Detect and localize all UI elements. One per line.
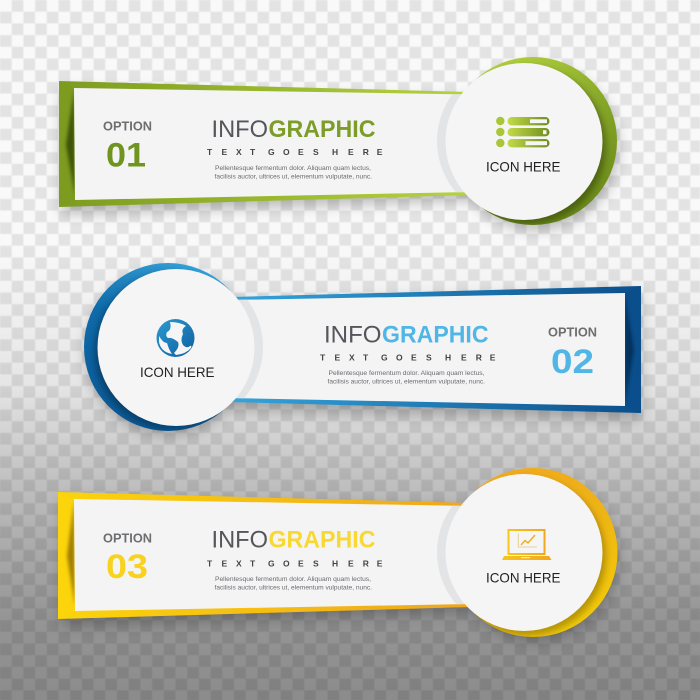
heading 03 xyxy=(212,527,376,554)
body text 02: Pellentesque fermentum dolor. Aliquam quam lectus, xyxy=(328,370,485,377)
ribbon frame 03 xyxy=(58,492,470,619)
icon: laptop chart xyxy=(502,530,552,560)
white circle 03 xyxy=(446,474,602,631)
icon caption 03: ICON HERE xyxy=(486,570,560,586)
body text 03: Pellentesque fermentum dolor. Aliquam quam lectus, xyxy=(215,576,371,583)
icon: list xyxy=(496,117,550,147)
option label 02: OPTION xyxy=(548,326,597,340)
icon caption 02: ICON HERE xyxy=(140,364,214,380)
number 03: 03 xyxy=(106,548,148,586)
panel: option 03 xyxy=(58,468,618,637)
panel: option 02 xyxy=(84,263,641,431)
white circle 02 xyxy=(98,269,254,426)
heading 02 xyxy=(324,322,489,349)
body text 03: facilisis auctor, ultrices ut, elementum vulputate, nunc. xyxy=(214,584,372,591)
icon caption 01: ICON HERE xyxy=(486,159,560,175)
heading 03: GRAPHIC xyxy=(268,527,376,554)
icon: globe xyxy=(156,319,194,357)
circle backing 03 xyxy=(437,468,618,637)
body text 01: facilisis auctor, ultrices ut, elementum vulputate, nunc. xyxy=(214,173,372,180)
number 02: 02 xyxy=(551,343,594,381)
option label 03: OPTION xyxy=(103,531,152,545)
circle backing 02 xyxy=(84,263,263,431)
panel: option 01 xyxy=(59,57,617,225)
heading 01 xyxy=(212,116,376,143)
subheading 03: TEXTGOESHERE xyxy=(207,559,383,569)
ribbon frame 01 xyxy=(59,81,470,207)
body text 01: Pellentesque fermentum dolor. Aliquam quam lectus, xyxy=(215,165,371,172)
circle backing 01 xyxy=(437,57,617,225)
body text 02: facilisis auctor, ultrices ut, elementum vulputate, nunc. xyxy=(328,378,485,385)
subheading 02: TEXTGOESHERE xyxy=(320,353,496,363)
heading 01: INFO xyxy=(212,116,268,143)
subheading 01: TEXTGOESHERE xyxy=(207,147,383,157)
heading 01: GRAPHIC xyxy=(268,116,376,143)
ribbon frame 02 xyxy=(230,286,641,413)
heading 03: INFO xyxy=(212,527,268,554)
option label 01: OPTION xyxy=(103,120,152,134)
heading 02: GRAPHIC xyxy=(382,322,489,349)
number 01: 01 xyxy=(106,137,146,175)
white circle 01 xyxy=(446,63,602,220)
heading 02: INFO xyxy=(324,322,382,349)
